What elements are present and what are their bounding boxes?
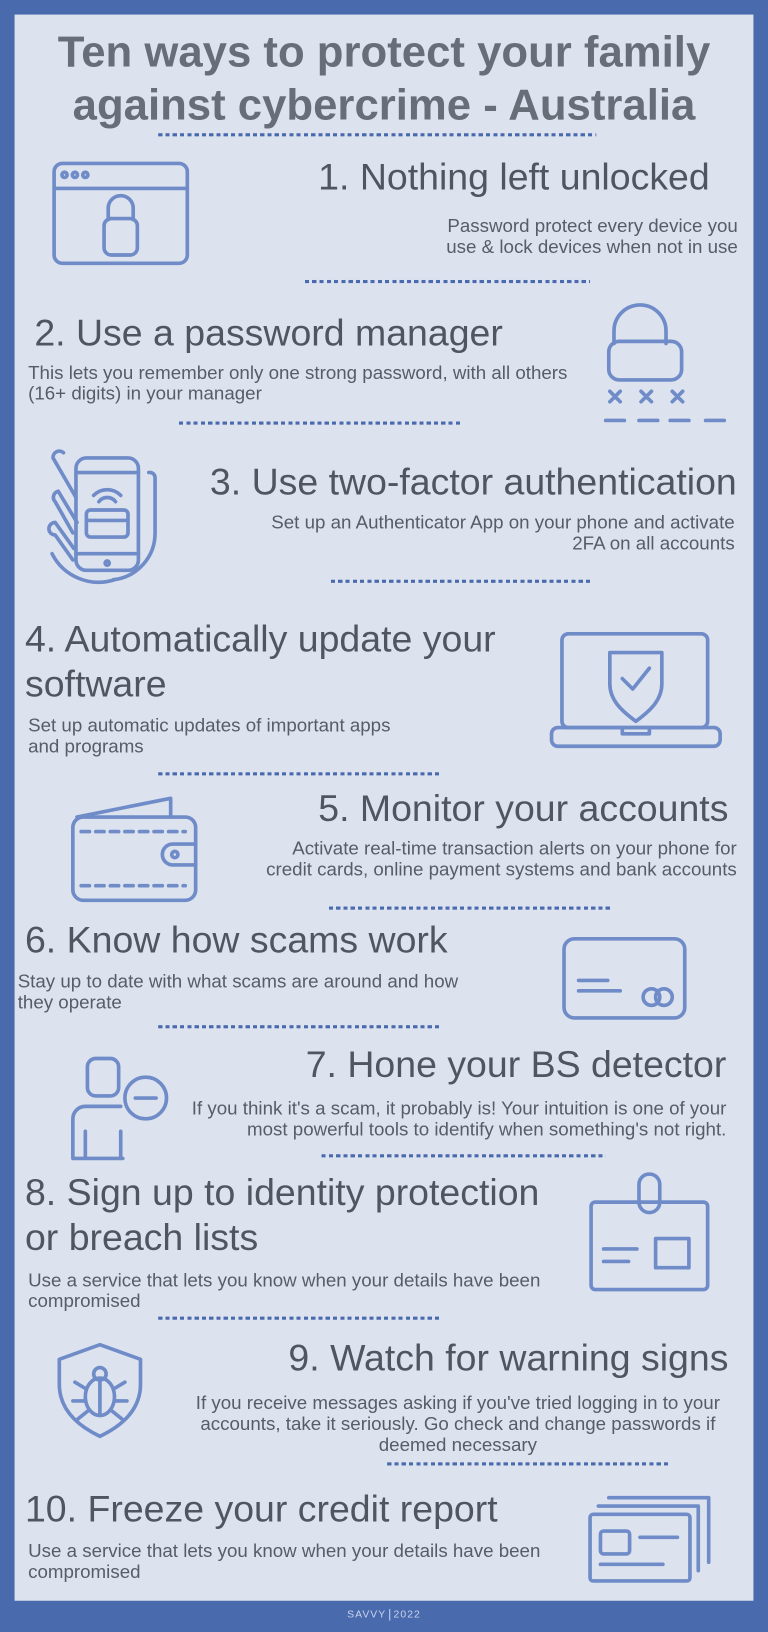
desc 2: (16+ digits) in your manager xyxy=(28,383,262,404)
icon: hand holding phone xyxy=(47,449,157,584)
desc 5 xyxy=(266,838,737,880)
heading 7: 7. Hone your BS detector xyxy=(306,1043,726,1086)
icon: browser lock xyxy=(52,162,190,266)
desc 3: 2FA on all accounts xyxy=(572,533,735,554)
desc 9: If you receive messages asking if you've tried logging in to your xyxy=(196,1393,720,1413)
desc 1: use & lock devices when not in use xyxy=(446,236,738,257)
desc 9 xyxy=(196,1393,720,1455)
desc 6: Stay up to date with what scams are around and how xyxy=(18,971,458,992)
desc 10: compromised xyxy=(28,1561,141,1582)
icon: wallet xyxy=(71,796,198,902)
desc 7: If you think it's a scam, it probably is! Your intuition is one of your xyxy=(192,1098,726,1119)
heading 2: 2. Use a password manager xyxy=(34,311,503,354)
desc 7: most powerful tools to identify when something's not right. xyxy=(247,1119,726,1140)
desc 1: Password protect every device you xyxy=(447,215,738,236)
icon: ID badge xyxy=(589,1172,710,1292)
desc 6: they operate xyxy=(18,992,122,1013)
desc 1 xyxy=(446,215,738,257)
icon: person minus xyxy=(71,1056,168,1160)
heading 4: software xyxy=(25,662,167,705)
desc 3 xyxy=(271,512,735,554)
desc 8: compromised xyxy=(28,1291,141,1311)
desc 4: and programs xyxy=(28,736,144,757)
desc 9: deemed necessary xyxy=(379,1434,537,1455)
desc 5: credit cards, online payment systems and bank accounts xyxy=(266,859,737,879)
desc 2: This lets you remember only one strong password, with all others xyxy=(28,362,567,383)
footer: SAVVY 2022 xyxy=(347,1609,421,1621)
title: Ten ways to protect your family xyxy=(58,27,710,76)
desc 4 xyxy=(28,715,390,757)
icon: card xyxy=(562,937,687,1020)
heading 6: 6. Know how scams work xyxy=(25,918,448,961)
desc 9: accounts, take it seriously. Go check and change passwords if xyxy=(200,1413,715,1434)
desc 4: Set up automatic updates of important apps xyxy=(28,715,390,736)
heading 3: 3. Use two-factor authentication xyxy=(210,460,737,503)
desc 10: Use a service that lets you know when your details have been xyxy=(28,1540,540,1561)
heading 4: 4. Automatically update your xyxy=(25,617,496,660)
desc 6 xyxy=(18,971,458,1013)
heading 10: 10. Freeze your credit report xyxy=(25,1487,498,1530)
heading 4 xyxy=(25,617,496,705)
heading 8 xyxy=(25,1171,539,1258)
desc 3: Set up an Authenticator App on your phone and activate xyxy=(271,512,735,533)
desc 8 xyxy=(28,1270,540,1311)
icon: shield bug xyxy=(58,1342,142,1438)
heading 1: 1. Nothing left unlocked xyxy=(318,155,710,198)
icon: stacked cards xyxy=(588,1496,710,1583)
heading 9: 9. Watch for warning signs xyxy=(288,1336,728,1379)
icon: padlock with password xyxy=(604,303,726,422)
title xyxy=(58,27,710,129)
title: against cybercrime - Australia xyxy=(73,80,695,129)
desc 5: Activate real-time transaction alerts on your phone for xyxy=(292,838,737,859)
desc 10 xyxy=(28,1540,540,1582)
heading 5: 5. Monitor your accounts xyxy=(318,787,728,830)
desc 8: Use a service that lets you know when your details have been xyxy=(28,1270,540,1291)
desc 2 xyxy=(28,362,567,404)
icon: laptop shield xyxy=(550,632,722,748)
heading 8: or breach lists xyxy=(25,1216,258,1258)
desc 7 xyxy=(192,1098,726,1140)
heading 8: 8. Sign up to identity protection xyxy=(25,1171,539,1214)
